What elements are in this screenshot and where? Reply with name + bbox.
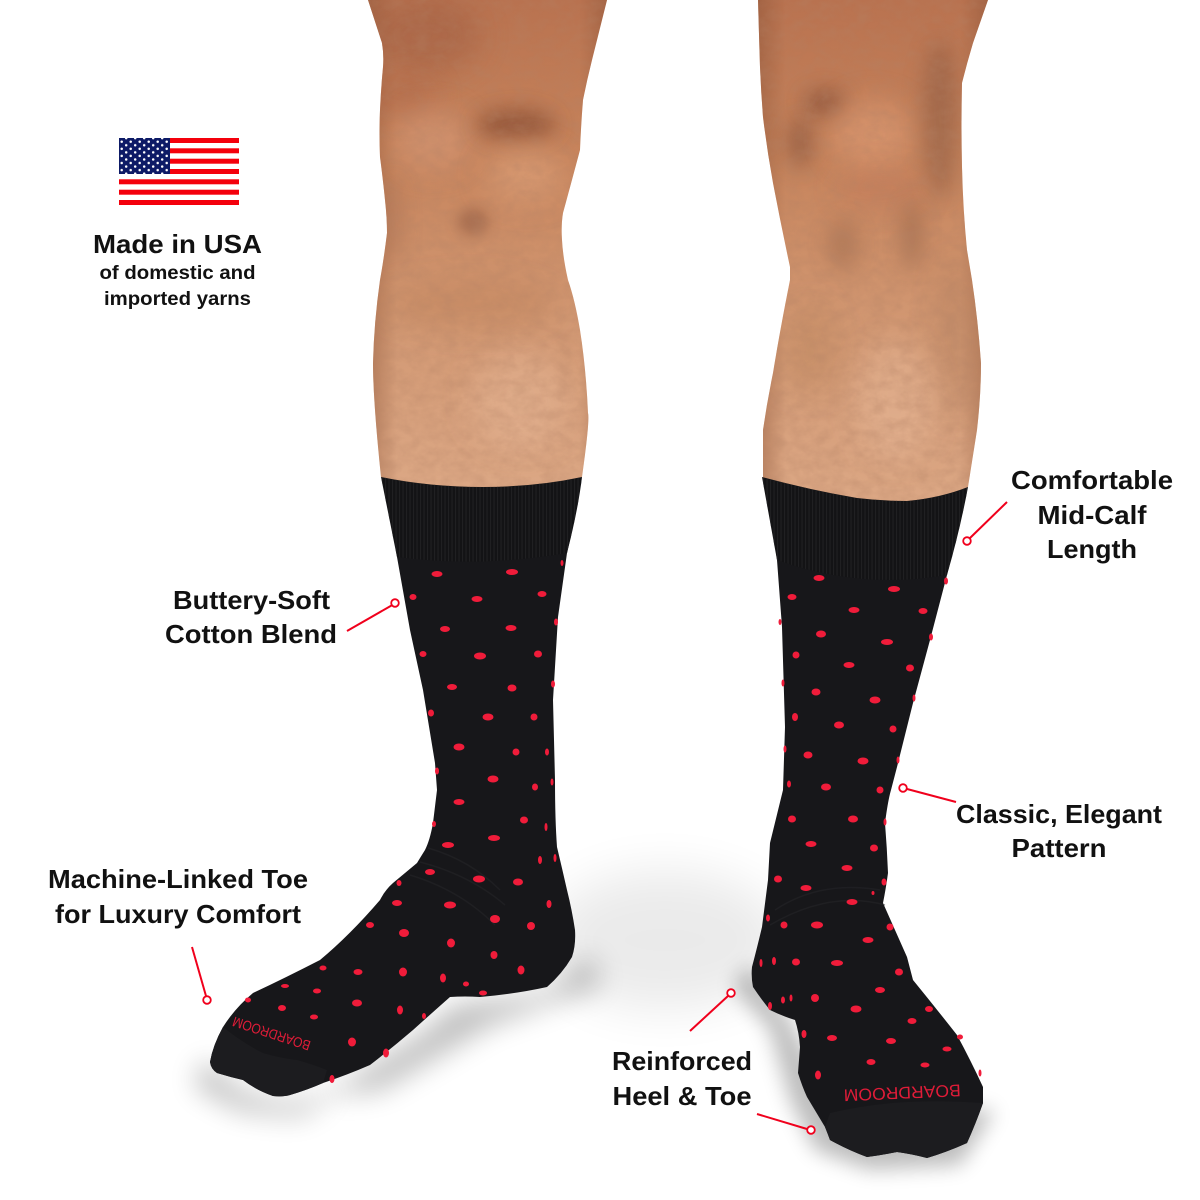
callout: mid-calf length: Mid-Calf [1038, 500, 1147, 530]
right leg [750, 0, 990, 525]
polka dots [245, 560, 564, 1083]
ankle wrinkles [410, 848, 505, 925]
callout: mid-calf length: Length [1047, 534, 1137, 564]
callout: mid-calf length: Comfortable [1011, 465, 1173, 495]
text: made in USA: imported yarns [104, 289, 251, 310]
callout: buttery-soft cotton blend [165, 585, 399, 649]
polka dots [760, 575, 982, 1080]
sock body [752, 530, 983, 1158]
callout: machine-linked toe: for Luxury Comfort [55, 899, 301, 929]
callout: reinforced heel and toe: Reinforced [612, 1046, 752, 1076]
callout: classic elegant pattern: Classic, Elegant [956, 799, 1162, 829]
brand text: BOARDROOM [843, 1080, 961, 1105]
callout: buttery-soft cotton blend: Buttery-Soft [173, 585, 330, 615]
callout: reinforced heel and toe: Heel & Toe [612, 1081, 752, 1111]
cuff [381, 477, 582, 562]
icon: US flag [119, 138, 239, 205]
toe [825, 1101, 983, 1158]
ankle wrinkles [770, 888, 885, 925]
callout: classic elegant pattern [899, 784, 1162, 863]
text: made in USA: Made in USA [93, 229, 262, 259]
brand text: BOARDROOM [230, 1014, 312, 1054]
callout: mid-calf length [963, 465, 1173, 564]
callout: machine-linked toe [48, 864, 308, 1004]
callout: classic elegant pattern: Pattern [1012, 833, 1106, 863]
text: made in USA: of domestic and [100, 263, 256, 284]
callout: machine-linked toe: Machine-Linked Toe [48, 864, 308, 894]
knee crease [476, 109, 556, 141]
left leg [360, 0, 610, 510]
left sock [210, 477, 582, 1096]
callout: reinforced heel and toe [612, 989, 815, 1134]
text: made in USA [93, 229, 262, 310]
toe [210, 1027, 327, 1096]
sock body [210, 535, 575, 1096]
right sock [752, 477, 983, 1158]
cuff [762, 477, 968, 580]
callout: buttery-soft cotton blend: Cotton Blend [165, 619, 337, 649]
floor shadows [195, 870, 995, 1170]
